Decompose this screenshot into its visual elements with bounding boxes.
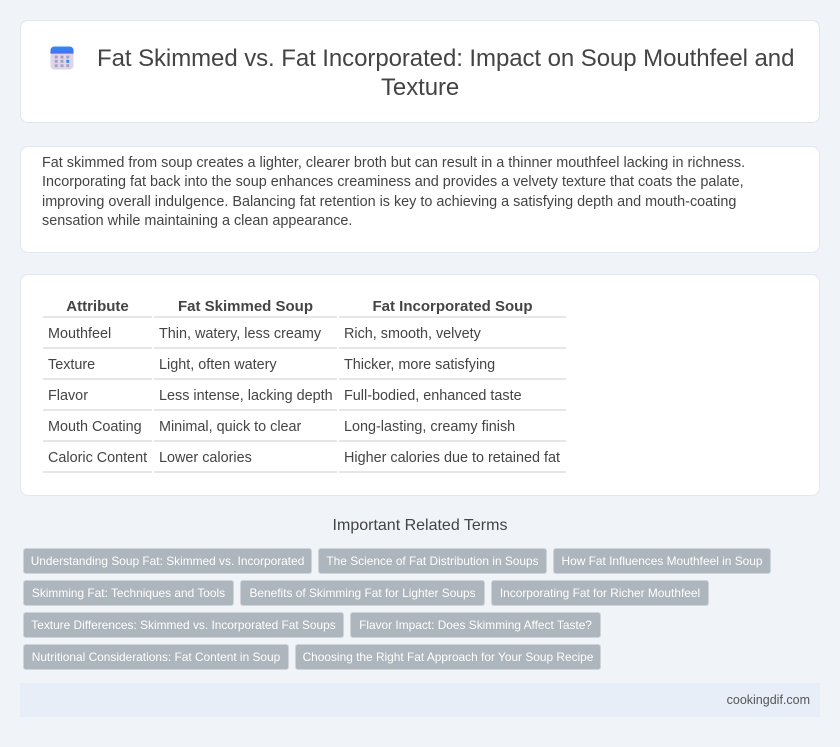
comparison table: Fat Skimmed Soup <box>178 298 313 315</box>
title <box>97 45 794 101</box>
comparison table: Thin, watery, less creamy <box>159 326 321 342</box>
related terms tags: Flavor Impact: Does Skimming Affect Taste? <box>359 618 592 632</box>
comparison table: Mouth Coating <box>48 419 142 435</box>
comparison table: Light, often watery <box>159 357 277 373</box>
text block: intro: sensation while maintaining a clean appearance. <box>42 213 352 229</box>
footer source text: cookingdif.com <box>727 693 810 707</box>
comparison table: Less intense, lacking depth <box>159 388 333 404</box>
icon: calendar <box>50 46 74 70</box>
related terms tags: Nutritional Considerations: Fat Content in Soup <box>32 650 280 664</box>
comparison table: Thicker, more satisfying <box>344 357 495 373</box>
related terms tags: How Fat Influences Mouthfeel in Soup <box>562 554 762 568</box>
related terms tags: Texture Differences: Skimmed vs. Incorporated Fat Soups <box>31 618 336 632</box>
title: Fat Skimmed vs. Fat Incorporated: Impact on Soup Mouthfeel and <box>97 45 794 72</box>
comparison table: Long-lasting, creamy finish <box>344 419 515 435</box>
heading: related terms: Important Related Terms <box>333 517 507 534</box>
comparison table: Mouthfeel <box>48 326 111 342</box>
related terms tags: Skimming Fat: Techniques and Tools <box>32 586 225 600</box>
comparison table: Caloric Content <box>48 450 147 466</box>
panel: intro <box>20 146 820 253</box>
related terms tags: Incorporating Fat for Richer Mouthfeel <box>500 586 700 600</box>
text block: intro: Fat skimmed from soup creates a lighter, clearer broth but can result in a thinner mouthfeel lacking in richness. <box>42 155 745 171</box>
comparison table: Full-bodied, enhanced taste <box>344 388 522 404</box>
related terms tags: Understanding Soup Fat: Skimmed vs. Incorporated <box>31 554 304 568</box>
comparison table: Lower calories <box>159 450 252 466</box>
panel: table card <box>20 274 820 496</box>
related terms tags: The Science of Fat Distribution in Soups <box>326 554 539 568</box>
comparison table: Texture <box>48 357 95 373</box>
comparison table: Fat Incorporated Soup <box>372 298 532 315</box>
related terms tags: Choosing the Right Fat Approach for Your Soup Recipe <box>303 650 593 664</box>
footer <box>20 683 820 717</box>
title: Texture <box>381 74 459 101</box>
comparison table: Higher calories due to retained fat <box>344 450 560 466</box>
panel: header <box>20 20 820 123</box>
text block: intro: improving overall indulgence. Balancing fat retention is key to achieving a satisfying depth and mouth-coating <box>42 194 736 210</box>
text block: intro <box>42 155 745 229</box>
comparison table: Rich, smooth, velvety <box>344 326 481 342</box>
text block: intro: Incorporating fat back into the soup enhances creaminess and provides a velvety texture that coats the palate, <box>42 174 744 190</box>
comparison table <box>43 298 566 473</box>
comparison table: Flavor <box>48 388 88 404</box>
comparison table: Minimal, quick to clear <box>159 419 301 435</box>
related terms tags: Benefits of Skimming Fat for Lighter Soups <box>249 586 476 600</box>
comparison table: Attribute <box>66 298 129 315</box>
related terms tags <box>23 548 771 670</box>
